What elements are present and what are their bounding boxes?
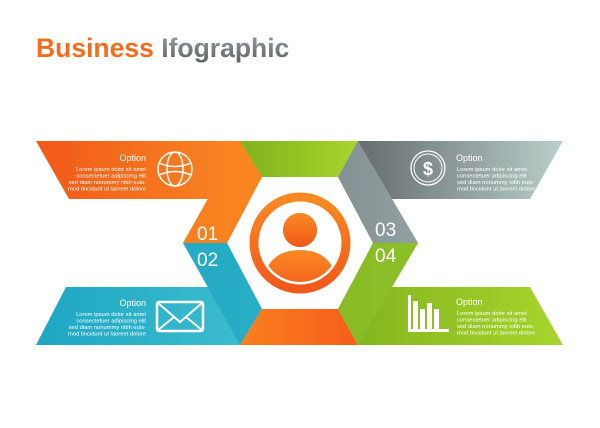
icon: dollar coin: $: [423, 159, 433, 179]
text: option 04: sed diam nonummy nibh euis-: [457, 324, 534, 330]
numbers: 02: [197, 250, 218, 271]
icon: user in circle: [254, 197, 346, 295]
text: option 04: Lorem ipsum dolor sit amet: [457, 311, 527, 317]
panel: option 04 green: [338, 243, 563, 345]
text: option 02: Option: [119, 298, 146, 308]
icon: envelope: [157, 302, 203, 331]
text: option 03: Lorem ipsum dolor sit amet: [457, 167, 527, 173]
panel: option 03 gray: [338, 141, 563, 243]
text: option 02: mod tincidunt ut laoreet dolore: [68, 332, 146, 338]
numbers: 01: [197, 224, 218, 245]
icon: globe: [158, 152, 192, 186]
text: option 04: [456, 297, 535, 336]
text: option 02: Lorem ipsum dolor sit amet: [76, 312, 146, 318]
icon: dollar coin: [411, 151, 445, 185]
text: option 01: [68, 153, 146, 192]
numbers: [197, 220, 397, 271]
text: option 03: mod tincidunt ut laoreet dolore: [457, 186, 535, 192]
panel: bottom orange bar: [240, 309, 358, 345]
text: option 04: Option: [456, 297, 483, 307]
text: option 02: sed diam nonummy nibh euis-: [69, 325, 146, 331]
title: Business Ifographic: [36, 33, 289, 63]
text: option 01: Lorem ipsum dolor sit amet: [76, 167, 146, 173]
panel: option 02 teal: [36, 243, 262, 345]
numbers: 04: [375, 246, 397, 267]
text: option 03: [456, 153, 535, 192]
panel: option 01 orange: [36, 141, 262, 243]
text: option 04: consectetuer adipiscing elit: [457, 318, 527, 324]
text: option 01: mod tincidunt ut laoreet dolore: [68, 186, 146, 192]
numbers: 03: [375, 220, 396, 241]
icon: bar chart: [408, 295, 449, 332]
text: option 03: Option: [456, 153, 483, 163]
panel: top green bar: [240, 141, 358, 177]
text: option 01: Option: [119, 153, 146, 163]
text: option 01: sed diam nonummy nibh euis-: [69, 180, 146, 186]
text: option 02: [68, 298, 146, 338]
text: option 03: sed diam nonummy nibh euis-: [457, 180, 534, 186]
text: option 02: consectetuer adipiscing elit: [76, 318, 146, 324]
text: option 01: consectetuer adipiscing elit: [76, 174, 146, 180]
text: option 03: consectetuer adipiscing elit: [457, 174, 527, 180]
text: option 04: mod tincidunt ut laoreet dolore: [457, 330, 535, 336]
